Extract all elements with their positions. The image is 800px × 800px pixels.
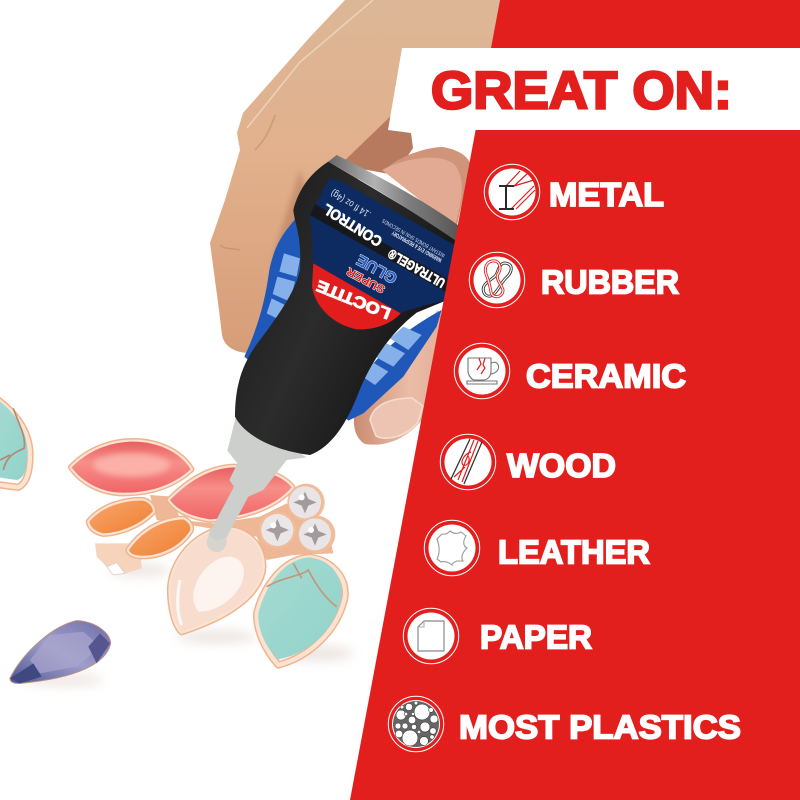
label: METAL xyxy=(549,176,664,213)
empty teardrop setting xyxy=(171,529,263,632)
icon: plastic pellets xyxy=(388,696,444,752)
glue bottle xyxy=(208,155,460,541)
label: RUBBER xyxy=(541,264,679,300)
coral stone left xyxy=(72,442,191,493)
blue grip right xyxy=(344,310,442,421)
glue drop xyxy=(207,532,227,552)
red panel xyxy=(350,0,800,800)
bottle body xyxy=(235,162,457,455)
left teal stone, cropped xyxy=(0,397,30,487)
loctite text: LOCTITE xyxy=(314,276,393,321)
warning text: WARNING! EYE & RESPIRATORY xyxy=(391,229,443,263)
jewellery photo xyxy=(0,397,353,686)
orange stone lower xyxy=(129,519,190,556)
super text: SUPER xyxy=(345,265,387,295)
item: paper xyxy=(403,608,592,664)
control text: CONTROL xyxy=(320,200,386,249)
item: most plastics xyxy=(388,696,741,752)
label: LEATHER xyxy=(498,534,650,570)
icon: wood plank xyxy=(440,434,496,490)
label: WOOD xyxy=(507,447,616,484)
title: GREAT ON: xyxy=(431,62,732,120)
icon: rubber bands xyxy=(469,252,525,308)
label: PAPER xyxy=(480,618,592,656)
banner background xyxy=(388,48,800,130)
red logo dome xyxy=(312,263,401,329)
item: rubber xyxy=(469,252,679,308)
back of hand xyxy=(210,0,500,353)
banner xyxy=(388,48,800,130)
orange stone upper xyxy=(89,501,153,533)
silver cap ring xyxy=(328,155,460,242)
knuckle creases xyxy=(220,115,275,250)
teal teardrop stone xyxy=(257,557,345,665)
crystal stones xyxy=(259,484,335,553)
item: metal xyxy=(484,164,664,220)
shadows under jewellery xyxy=(23,563,353,686)
hand shadow xyxy=(265,170,310,330)
thumb nail xyxy=(370,398,423,438)
lower thumb xyxy=(354,310,447,445)
upper finger highlight xyxy=(382,158,462,225)
coral stone right xyxy=(170,467,292,519)
size text: .14 fl oz (4g) xyxy=(329,187,373,220)
purple gem xyxy=(10,621,111,683)
ultragel text: ULTRAGEL® xyxy=(385,246,448,291)
brooch clasp xyxy=(95,543,142,575)
item: ceramic xyxy=(454,343,686,399)
glue text: GLUE xyxy=(354,251,400,287)
icon: paper sheet xyxy=(403,608,459,664)
upper finger xyxy=(385,147,470,235)
label: MOST PLASTICS xyxy=(459,708,741,746)
shaded finger under banner xyxy=(340,112,413,175)
icon: leather hide xyxy=(424,520,480,576)
navy label xyxy=(309,178,455,313)
item: wood xyxy=(440,434,616,490)
brooch base xyxy=(150,495,333,560)
icon: cracked cup xyxy=(454,343,510,399)
nozzle xyxy=(208,413,307,541)
black band xyxy=(310,204,451,293)
icon: steel beam xyxy=(484,164,540,220)
item: leather xyxy=(424,520,650,576)
hand holding bottle xyxy=(210,0,500,445)
blue grip left xyxy=(244,219,303,360)
instant bonds text: INSTANT BONDS SKIN IN SECONDS xyxy=(381,217,446,258)
label: CERAMIC xyxy=(526,358,686,394)
crease line xyxy=(247,0,373,128)
